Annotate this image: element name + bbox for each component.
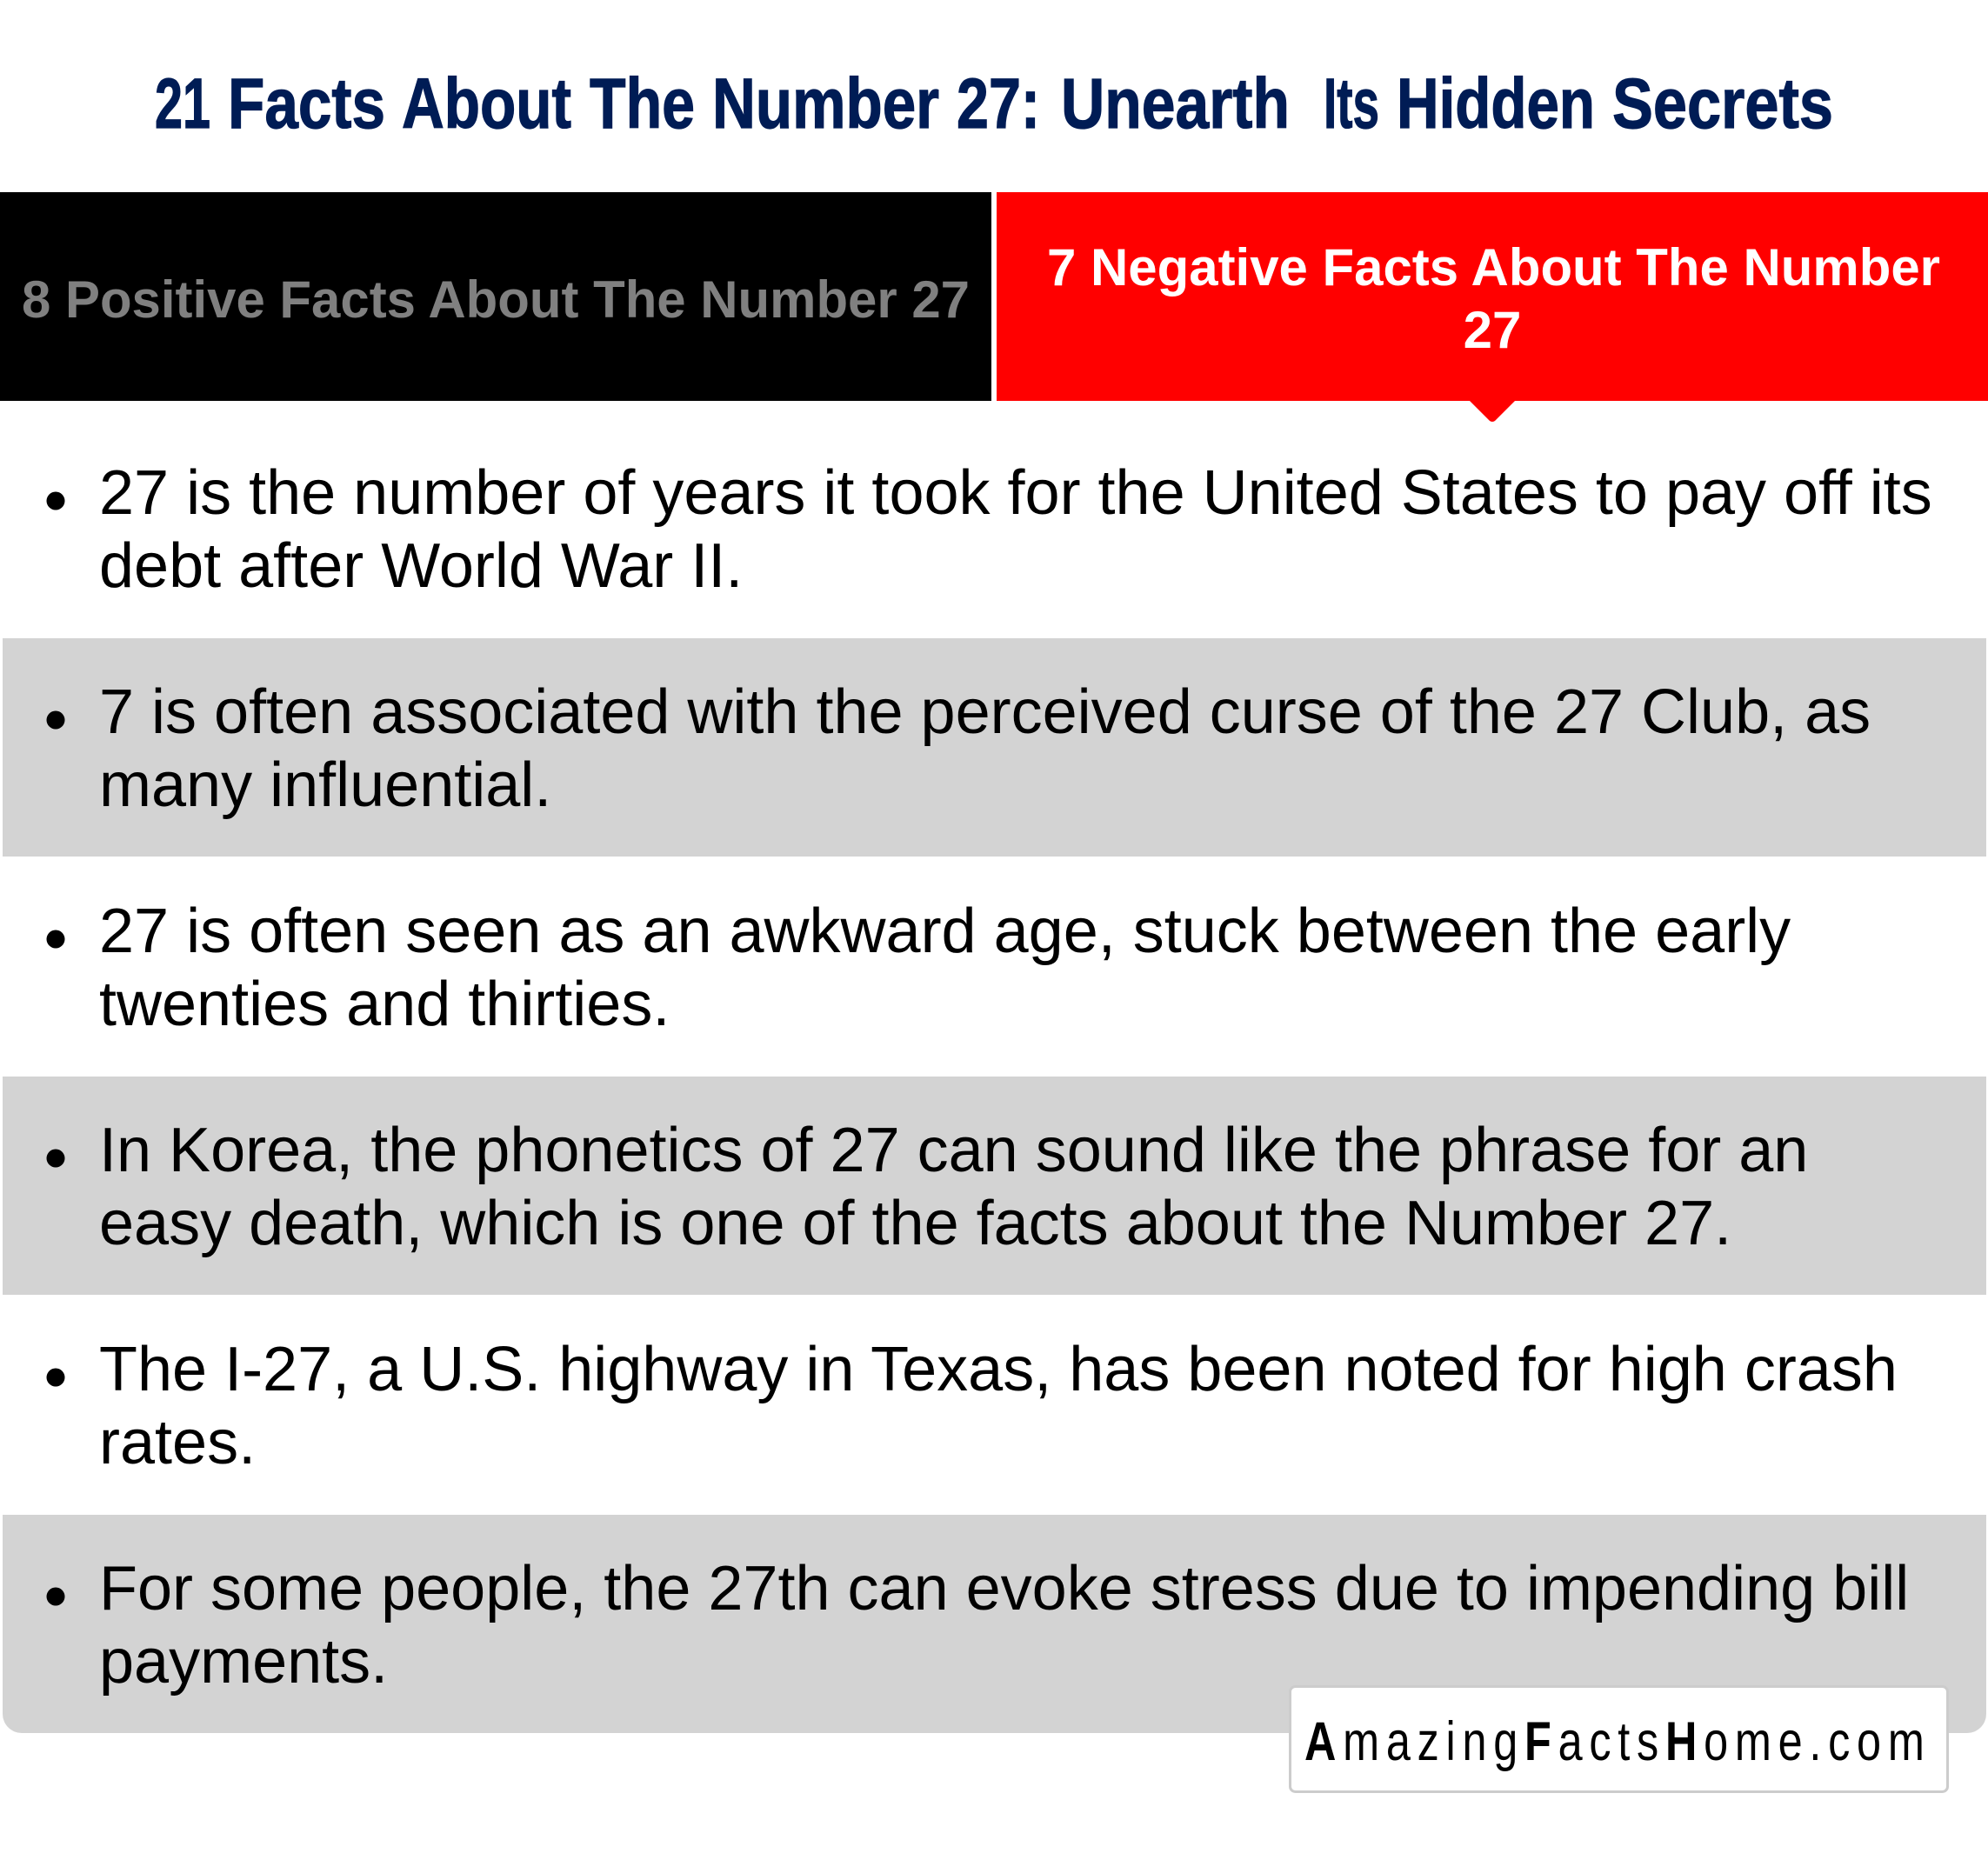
fact 3: twenties and thirties.	[99, 970, 670, 1039]
title: Number	[712, 64, 939, 143]
tab: positive facts: 8 Positive Facts About The Number 27	[22, 270, 970, 329]
fact 3	[47, 897, 1791, 1039]
title: About	[402, 64, 571, 143]
title: The	[590, 64, 695, 143]
watermark: AmazingFactsHome.com: AmazingFactsHome.com	[1304, 1711, 1925, 1772]
fact 5: rates.	[99, 1408, 256, 1477]
title	[155, 64, 1833, 143]
fact 3: 27 is often seen as an awkward age, stuck between the early	[99, 897, 1791, 966]
fact 6	[3, 1515, 1986, 1733]
fact 1: debt after World War II.	[99, 531, 743, 601]
fact 1: 27 is the number of years it took for the United States to pay off its	[99, 458, 1932, 528]
fact 2: many influential.	[99, 750, 551, 820]
tab: positive facts	[0, 192, 991, 401]
title: 27:	[957, 64, 1040, 143]
fact 1	[47, 458, 1932, 601]
title: Its	[1324, 64, 1379, 143]
fact 5	[47, 1335, 1898, 1477]
title: Unearth	[1061, 64, 1290, 143]
fact 2: 7 is often associated with the perceived curse of the 27 Club, as	[99, 677, 1871, 747]
fact 4	[3, 1077, 1986, 1295]
fact 4: In Korea, the phonetics of 27 can sound like the phrase for an	[99, 1116, 1808, 1185]
title: Facts	[228, 64, 385, 143]
title: Hidden	[1397, 64, 1595, 143]
tab: negative facts: 27	[1464, 301, 1521, 359]
fact 4: easy death, which is one of the facts about the Number 27.	[99, 1189, 1731, 1258]
tab: negative facts	[997, 192, 1988, 422]
fact 2	[3, 638, 1986, 857]
fact 5: The I-27, a U.S. highway in Texas, has been noted for high crash	[99, 1335, 1898, 1404]
title: Secrets	[1612, 64, 1833, 143]
tab: negative facts: 7 Negative Facts About The Number	[1047, 238, 1940, 297]
title: 21	[155, 64, 210, 143]
fact 6: For some people, the 27th can evoke stress due to impending bill	[99, 1554, 1909, 1623]
fact 6: payments.	[99, 1627, 388, 1697]
watermark: AmazingFactsHome.com	[1291, 1687, 1948, 1791]
